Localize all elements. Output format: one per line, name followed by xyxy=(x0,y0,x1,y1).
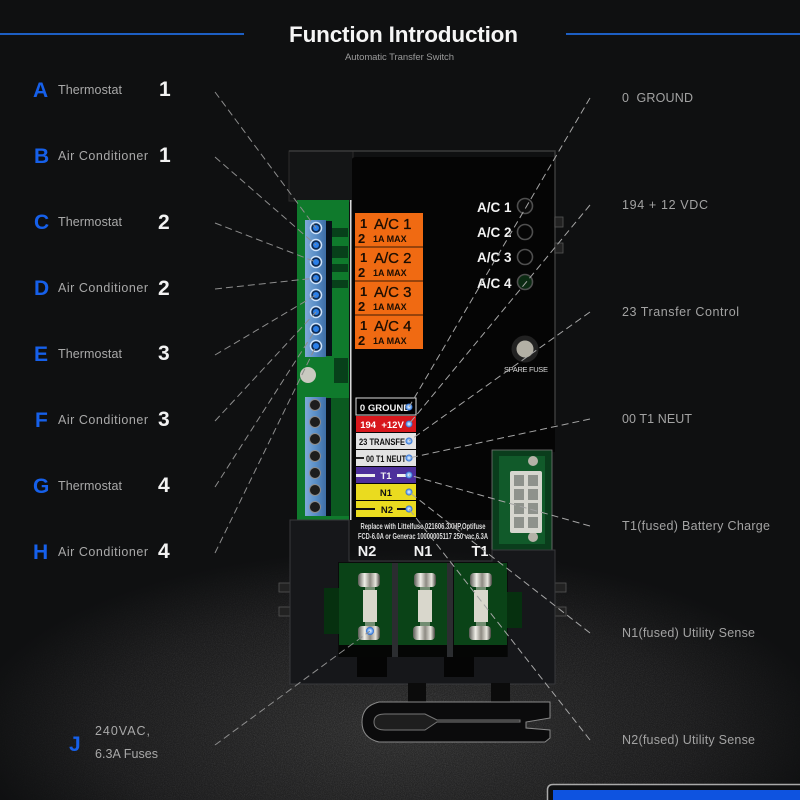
orange A/C relay labels: 1 xyxy=(360,284,367,299)
spare fuse holder xyxy=(504,336,548,374)
fuse N2 xyxy=(358,573,380,640)
right labels: T1(fused) Battery Charge xyxy=(622,519,770,533)
label E xyxy=(34,342,170,366)
orange A/C relay labels: 1A MAX xyxy=(373,302,407,312)
label B: Air Conditioner xyxy=(58,149,148,163)
label E: E xyxy=(34,343,48,366)
label D: 2 xyxy=(158,277,170,300)
white molex connector xyxy=(510,471,542,533)
right labels: 00 T1 NEUT xyxy=(622,412,692,426)
replacement fuse note: Replace with Littelfuse 021606.3XHP,Optifuse xyxy=(360,522,486,531)
subtitle: Automatic Transfer Switch xyxy=(345,52,454,63)
terminal labels xyxy=(356,398,416,517)
label F: 3 xyxy=(158,408,170,431)
board mounting screw xyxy=(300,367,316,383)
orange A/C relay labels: 2 xyxy=(358,299,365,314)
label H xyxy=(33,540,170,564)
label H: Air Conditioner xyxy=(58,545,148,559)
side tabs xyxy=(279,217,566,616)
label A: Thermostat xyxy=(58,83,123,97)
orange A/C relay labels: A/C 3 xyxy=(374,284,412,301)
label C: Thermostat xyxy=(58,215,123,229)
bottom latches xyxy=(357,657,474,677)
label G: Thermostat xyxy=(58,479,123,493)
right labels: N1(fused) Utility Sense xyxy=(622,626,755,640)
fuse bay xyxy=(324,562,522,657)
label F xyxy=(35,408,170,432)
lower blue terminal block xyxy=(305,397,331,516)
label J fuses: 6.3A Fuses xyxy=(95,747,158,761)
fuse N1 xyxy=(413,573,436,640)
fuse labels xyxy=(358,544,488,560)
blue bar cropped at bottom xyxy=(547,784,800,800)
label H: H xyxy=(33,541,48,564)
label C xyxy=(34,211,170,234)
title: Function Introduction xyxy=(289,22,518,47)
label J fuses xyxy=(69,724,158,761)
right labels: 23 Transfer Control xyxy=(622,305,739,319)
right leader lines xyxy=(409,98,590,740)
label D: D xyxy=(34,277,49,300)
label J fuses: 240VAC, xyxy=(95,724,150,738)
label E: 3 xyxy=(158,342,170,365)
orange A/C relay labels: 1A MAX xyxy=(373,336,407,346)
terminal labels: 0 GROUND xyxy=(360,403,410,414)
bottom housing xyxy=(290,520,555,684)
A/C indicator lights: A/C 4 xyxy=(477,276,512,291)
left leader lines xyxy=(215,92,370,745)
A/C indicator lights xyxy=(477,198,532,291)
orange A/C relay labels: A/C 1 xyxy=(374,216,412,233)
orange A/C relay labels: 2 xyxy=(358,265,365,280)
fuse labels: N2 xyxy=(358,544,376,560)
right green connector board xyxy=(492,450,552,550)
label G: G xyxy=(33,475,49,498)
header xyxy=(0,22,800,63)
left top housing xyxy=(289,151,353,201)
label F: F xyxy=(35,409,48,432)
terminal labels: T1 xyxy=(380,471,392,482)
label C: C xyxy=(34,211,49,234)
label A: A xyxy=(33,79,48,102)
orange A/C relay labels: A/C 2 xyxy=(374,250,412,267)
right labels: N2(fused) Utility Sense xyxy=(622,733,755,747)
label E: Thermostat xyxy=(58,347,123,361)
right labels xyxy=(622,91,770,747)
main black panel xyxy=(352,157,555,520)
terminal labels: 194 +12V xyxy=(360,420,404,431)
label D: Air Conditioner xyxy=(58,281,148,295)
replacement fuse note xyxy=(358,522,488,541)
label B: 1 xyxy=(159,144,171,167)
spare fuse holder: SPARE FUSE xyxy=(504,365,548,374)
label F: Air Conditioner xyxy=(58,413,148,427)
fuse labels: N1 xyxy=(414,544,432,560)
terminal labels: 00 T1 NEUT xyxy=(366,454,406,465)
label G: 4 xyxy=(158,474,170,497)
terminal LEDs xyxy=(406,404,412,512)
orange A/C relay labels: 1A MAX xyxy=(373,268,407,278)
label A: 1 xyxy=(159,78,171,101)
DIN rail clip xyxy=(362,683,550,742)
orange A/C relay labels xyxy=(355,213,423,349)
left green circuit board xyxy=(297,200,349,522)
orange A/C relay labels: 1 xyxy=(360,318,367,333)
label B: B xyxy=(34,145,49,168)
terminal labels: N2 xyxy=(381,505,393,516)
label A xyxy=(33,78,171,102)
label D xyxy=(34,277,170,300)
fuse labels: T1 xyxy=(472,544,488,560)
orange A/C relay labels: 2 xyxy=(358,231,365,246)
orange A/C relay labels: 1 xyxy=(360,250,367,265)
orange A/C relay labels: A/C 4 xyxy=(374,318,412,335)
label G xyxy=(33,474,170,498)
label B xyxy=(34,144,171,168)
terminal labels: N1 xyxy=(380,488,393,499)
A/C indicator lights: A/C 2 xyxy=(477,225,512,240)
orange A/C relay labels: 1 xyxy=(360,216,367,231)
device: transfer switch control board xyxy=(279,151,566,742)
label C: 2 xyxy=(158,211,170,234)
left labels A to H xyxy=(33,78,171,564)
fuse LED xyxy=(366,627,374,635)
A/C indicator lights: A/C 3 xyxy=(477,250,512,265)
A/C indicator lights: A/C 1 xyxy=(477,200,512,215)
orange A/C relay labels: 1A MAX xyxy=(373,234,407,244)
label J fuses: J xyxy=(69,733,81,756)
terminal labels: 23 TRANSFE xyxy=(359,437,405,448)
orange A/C relay labels: 2 xyxy=(358,333,365,348)
fuse T1 xyxy=(469,573,492,640)
replacement fuse note: FCD-6.0A or Generac 10000005117 250 vac,6.3A xyxy=(358,532,488,541)
upper blue terminal block xyxy=(305,220,332,357)
right labels: 194 + 12 VDC xyxy=(622,198,708,212)
label H: 4 xyxy=(158,540,170,563)
right labels: 0 GROUND xyxy=(622,91,693,105)
